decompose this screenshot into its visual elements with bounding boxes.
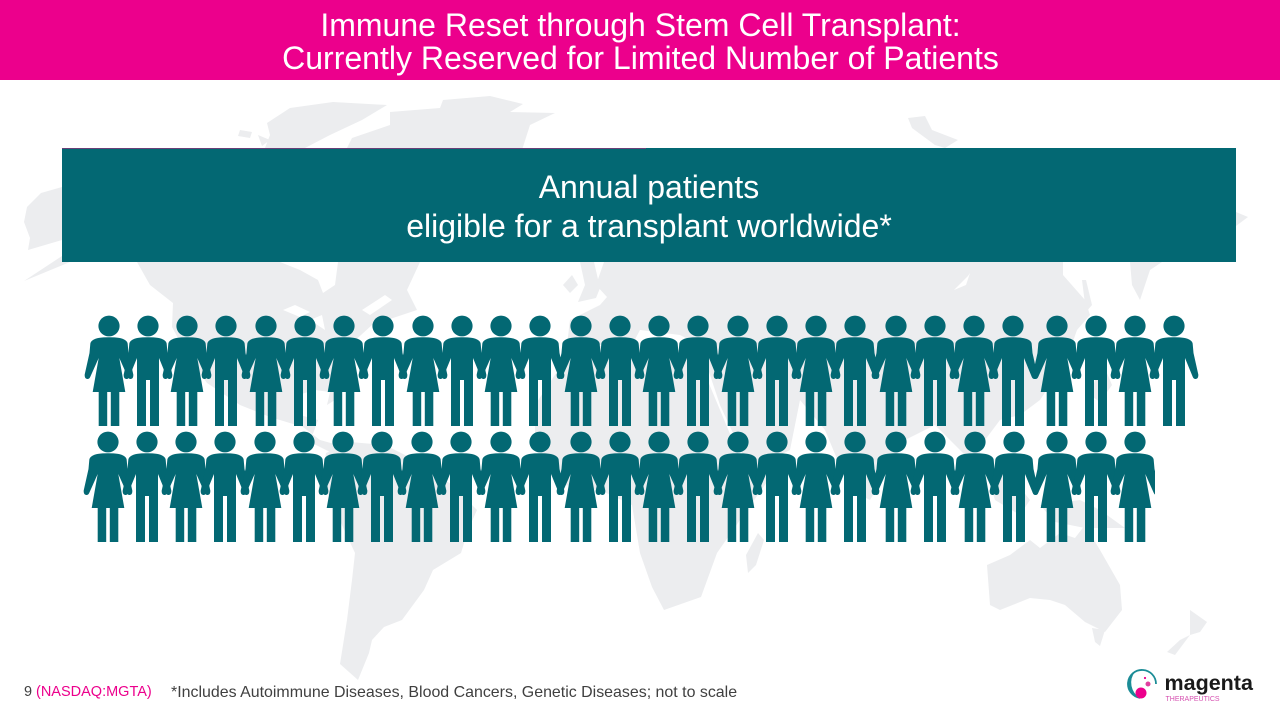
- panel: annual patients banner: [62, 148, 1236, 262]
- banner text: Annual patients: [539, 169, 759, 205]
- title: Currently Reserved for Limited Number of Patients: [282, 40, 999, 76]
- footnote: *Includes Autoimmune Diseases, Blood Cancers, Genetic Diseases; not to scale: [171, 684, 737, 701]
- map: japan: [1085, 345, 1112, 402]
- map: greenland: [347, 96, 555, 150]
- map: australia: [987, 525, 1122, 632]
- header band: [0, 0, 1280, 80]
- accent line on banner: [62, 148, 646, 149]
- row 1: 28 people: [85, 316, 1198, 426]
- map: africa: [535, 342, 772, 610]
- logo tagline: THERAPEUTICS: [1166, 696, 1220, 703]
- map: south america: [322, 442, 477, 680]
- title: [282, 7, 999, 76]
- map: arctic islands: [238, 102, 387, 148]
- title: Immune Reset through Stem Cell Transplant:: [320, 7, 961, 43]
- map: britain and ireland: [563, 262, 600, 302]
- logo icon: [1127, 669, 1157, 699]
- map: kamchatka: [1130, 262, 1162, 300]
- map: north and central america: [24, 180, 420, 452]
- banner text: eligible for a transplant worldwide*: [406, 208, 892, 244]
- map: tasmania: [1092, 628, 1105, 646]
- map: pacific islet: [1236, 212, 1248, 226]
- map: eurasia: [567, 262, 1090, 500]
- map: madagascar: [746, 533, 764, 573]
- row 2: 27 people: [84, 432, 1159, 542]
- map: indonesia: [985, 470, 1125, 528]
- page number: 9: [24, 684, 32, 700]
- banner text: [406, 169, 892, 244]
- map: sakhalin: [1082, 280, 1092, 312]
- map: new zealand: [1167, 610, 1207, 655]
- ticker: (NASDAQ:MGTA): [36, 684, 152, 700]
- logo wordmark: magenta: [1164, 671, 1253, 695]
- logo: magenta therapeutics: [1127, 669, 1254, 703]
- map: svalbard: [908, 116, 958, 148]
- people pictogram: [84, 316, 1198, 542]
